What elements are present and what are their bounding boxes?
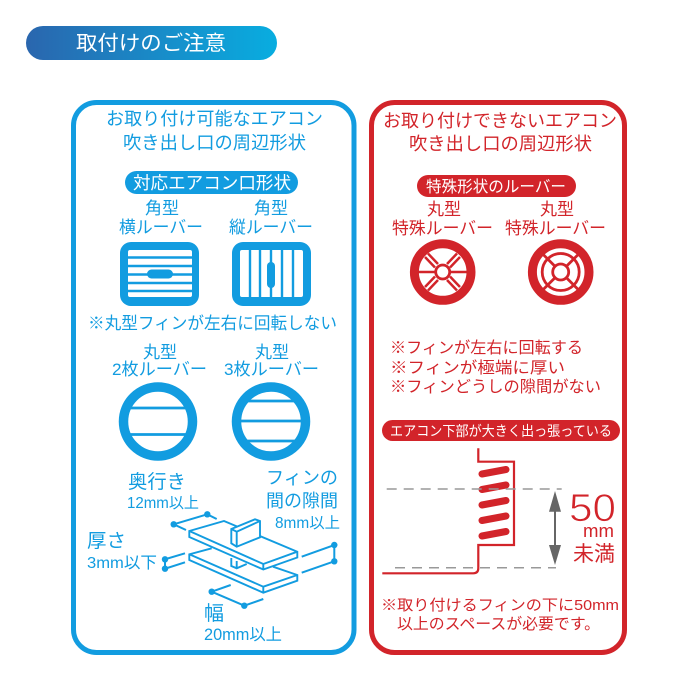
- list: reasons not compatible: ※フィンどうしの隙間がない: [390, 378, 601, 396]
- title banner: 取付けのご注意: [76, 32, 226, 55]
- label pill: special louvers: 特殊形状のルーバー: [426, 178, 566, 196]
- panel heading: incompatible: 吹き出し口の周辺形状: [409, 134, 592, 154]
- arrow: 50mm height: [549, 491, 561, 565]
- label pill: supported vent shapes: 対応エアコン口形状: [133, 173, 292, 193]
- label: round 3-blade louver: 丸型: [255, 343, 289, 362]
- label: round special louver left: 特殊ルーバー: [392, 219, 493, 238]
- panel heading: compatible: 吹き出し口の周辺形状: [123, 133, 306, 153]
- label: gap between fins: 間の隙間: [266, 491, 338, 511]
- label: round special louver left: 丸型: [427, 200, 461, 219]
- note: space needed under fin: ※取り付けるフィンの下に50mm: [381, 597, 619, 614]
- panel heading: incompatible: お取り付けできないエアコン: [383, 111, 617, 131]
- icon: vertical louver: [232, 242, 311, 306]
- dashed guide lines: [387, 489, 562, 568]
- note: round fin does not rotate: ※丸型フィンが左右に回転しない: [88, 314, 337, 333]
- list: reasons not compatible: ※フィンが極端に厚い: [390, 359, 565, 377]
- icon: round 2-blade louver: [120, 387, 196, 456]
- lower fin plate: [189, 548, 297, 593]
- label: under 50mm: mm: [583, 521, 614, 541]
- label pill: bottom protrusion: エアコン下部が大きく出っ張っている: [390, 423, 612, 439]
- label: round special louver right: [505, 200, 606, 238]
- label: round 2-blade louver: 丸型: [143, 343, 177, 362]
- panel heading: compatible: お取り付け可能なエアコン: [106, 109, 323, 129]
- label: width: 幅: [204, 602, 224, 625]
- upper fin plate: [189, 521, 297, 570]
- label: gap between fins: 8mm以上: [275, 514, 340, 532]
- label: depth: 奥行き: [128, 471, 186, 493]
- note: space needed under fin: [381, 597, 619, 633]
- label: round special louver right: 丸型: [540, 200, 574, 219]
- label: depth: 12mm以上: [127, 494, 199, 512]
- icon: ringed round louver: [532, 244, 589, 300]
- label: under 50mm: [569, 487, 616, 566]
- label pill: special louvers: [417, 175, 576, 197]
- depth dimension line: [170, 511, 217, 530]
- thickness dimension line: [162, 553, 185, 572]
- label: square horizontal louver: [119, 199, 203, 237]
- label: under 50mm: 未満: [573, 543, 615, 566]
- panel: compatible air conditioners: [74, 102, 354, 652]
- panel heading: compatible: [106, 109, 323, 153]
- label: under 50mm: 50: [569, 487, 616, 530]
- list: reasons not compatible: ※フィンが左右に回転する: [390, 339, 583, 357]
- label: round 2-blade louver: [112, 343, 207, 379]
- label: thickness: [87, 531, 157, 572]
- diagram: fin dimensions: [162, 511, 337, 609]
- label: round special louver left: [392, 200, 493, 238]
- label: width: 20mm以上: [204, 625, 282, 644]
- width dimension line: [208, 585, 263, 609]
- icon: horizontal louver: [120, 242, 199, 306]
- label: round 2-blade louver: 2枚ルーバー: [112, 360, 207, 379]
- label: gap between fins: [266, 468, 340, 532]
- label: round special louver right: 特殊ルーバー: [505, 219, 606, 238]
- label: square horizontal louver: 角型: [145, 199, 179, 218]
- label: square horizontal louver: 横ルーバー: [119, 218, 203, 237]
- list: reasons not compatible: [390, 339, 601, 396]
- label: depth: [127, 471, 199, 512]
- fins: [482, 470, 506, 536]
- fin gap dimension line: [302, 542, 337, 573]
- icon: round 3-blade louver: [233, 387, 309, 456]
- label: square vertical louver: [229, 199, 313, 237]
- panel heading: incompatible: [383, 111, 617, 154]
- label: thickness: 3mm以下: [87, 555, 157, 572]
- diagram: air conditioner side view: [382, 448, 562, 573]
- label: round 3-blade louver: [224, 343, 319, 379]
- label: gap between fins: フィンの: [266, 468, 338, 488]
- note: space needed under fin: 以上のスペースが必要です。: [397, 615, 600, 633]
- icon: spoked round louver: [414, 244, 471, 300]
- label: thickness: 厚さ: [87, 531, 126, 552]
- label: square vertical louver: 縦ルーバー: [229, 218, 313, 237]
- title banner: [26, 26, 277, 60]
- fin post lower: [231, 558, 247, 568]
- label: round 3-blade louver: 3枚ルーバー: [224, 360, 319, 379]
- label: square vertical louver: 角型: [254, 199, 288, 218]
- label: width: [204, 602, 282, 644]
- panel: incompatible air conditioners: [372, 102, 624, 652]
- fin post upper: [231, 519, 260, 547]
